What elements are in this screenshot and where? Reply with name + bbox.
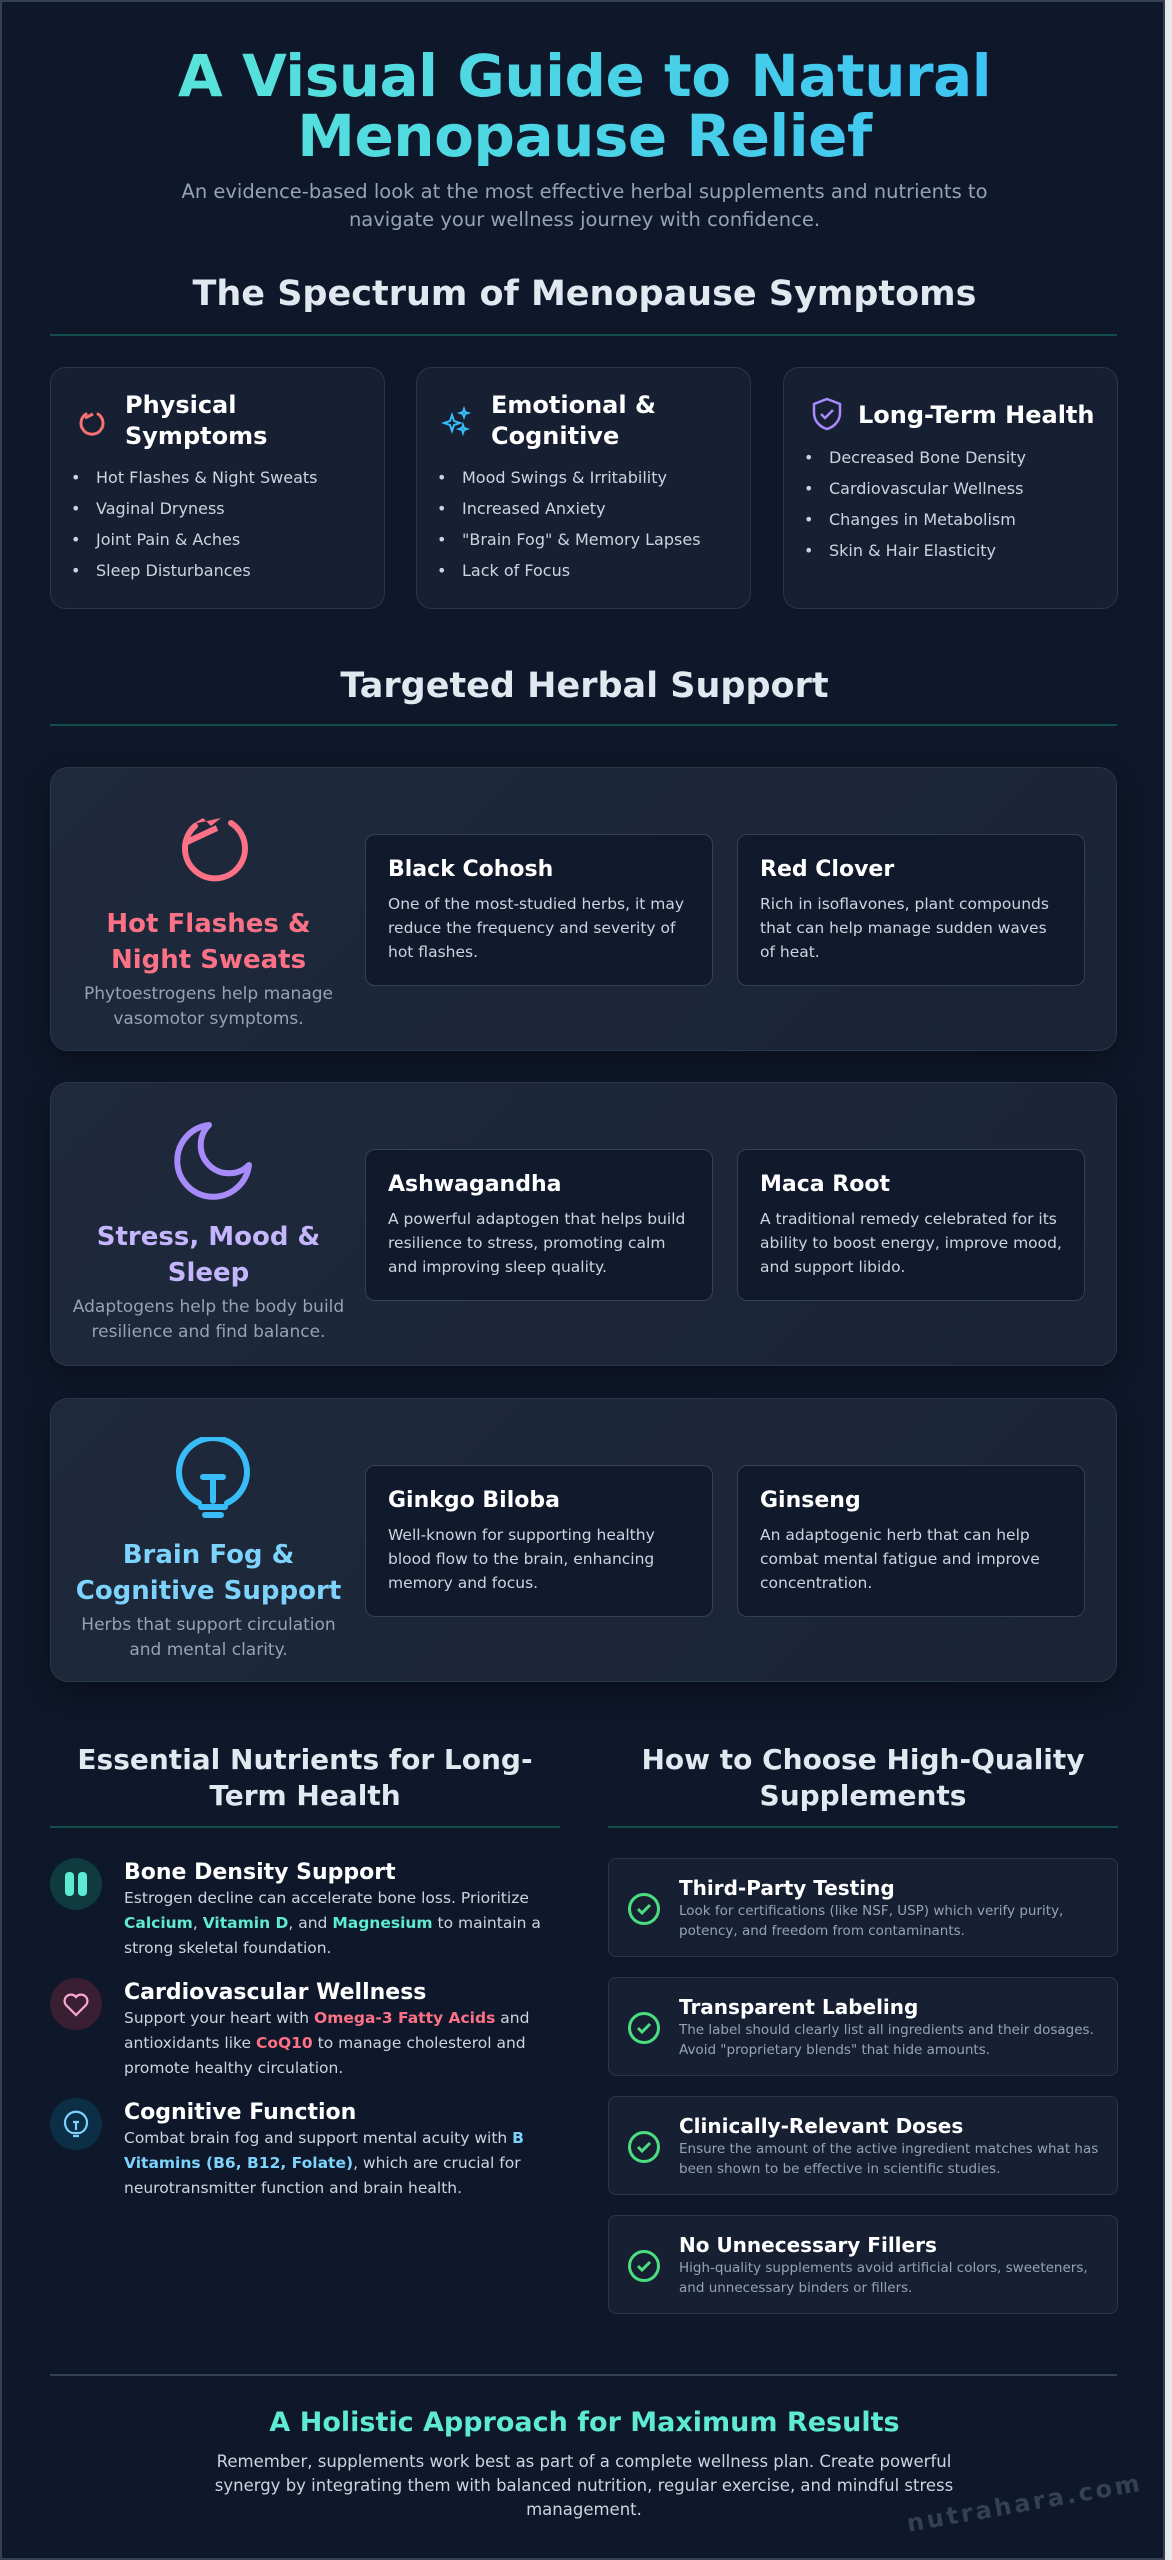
- list: Decreased Bone Density: [829, 448, 1026, 467]
- panel: hot flashes: [50, 767, 1117, 1051]
- list: Cardiovascular Wellness: [829, 479, 1023, 498]
- nutrient: cognitive: Combat brain fog and support mental acuity with B Vitamins (B6, B12, Folate), which are crucial for neurotransmitter function and brain health.: [124, 2129, 524, 2197]
- list: Vaginal Dryness: [96, 499, 225, 518]
- nutrient: cardiovascular: Support your heart with Omega-3 Fatty Acids and antioxidants like CoQ10 to manage cholesterol and promote healthy circulation.: [124, 2009, 529, 2077]
- supplement: transparent labeling: Transparent Labeling: [679, 1995, 918, 2019]
- supplement: clinically-relevant doses: Clinically-Relevant Doses: [679, 2114, 963, 2138]
- label: Cognitive Support: [76, 1576, 341, 1606]
- list: Hot Flashes & Night Sweats: [96, 468, 318, 487]
- nutrient: bone density: [50, 1858, 541, 1957]
- card: red clover: [737, 834, 1085, 986]
- supplement: third-party testing: Look for certifications (like NSF, USP) which verify purity, potency, and freedom from contaminants.: [679, 1903, 1063, 1939]
- list: Joint Pain & Aches: [96, 530, 240, 549]
- card: ashwagandha: Ashwagandha: [388, 1172, 561, 1197]
- panel: stress mood sleep: [50, 1082, 1117, 1366]
- label: Adaptogens help the body build resilience and find balance.: [73, 1297, 344, 1342]
- card: ginseng: Ginseng: [760, 1488, 861, 1513]
- card: ginkgo: Ginkgo Biloba: [388, 1488, 560, 1513]
- label: Sleep: [168, 1258, 249, 1288]
- supplement: transparent labeling: [608, 1977, 1118, 2076]
- heading: Emotional &: [491, 391, 656, 419]
- list: [73, 468, 318, 580]
- nutrient: cardiovascular: Cardiovascular Wellness: [124, 1980, 426, 2005]
- icon: check: [628, 2131, 660, 2163]
- list: Lack of Focus: [462, 561, 570, 580]
- supplement: third-party testing: [608, 1858, 1118, 1957]
- title: Menopause Relief: [297, 102, 872, 170]
- card: black cohosh: One of the most-studied herbs, it may reduce the frequency and severity of hot flashes.: [388, 895, 684, 961]
- icon: bulb: [50, 2098, 102, 2150]
- footer heading: A Holistic Approach for Maximum Results: [269, 2407, 900, 2438]
- card: maca root: A traditional remedy celebrated for its ability to boost energy, improve mood, and support libido.: [760, 1210, 1062, 1276]
- icon: flame ring: [182, 818, 248, 882]
- heading: Physical: [125, 391, 236, 419]
- heading: Symptoms: [125, 422, 267, 450]
- label: Herbs that support circulation and mental clarity.: [81, 1615, 336, 1660]
- label: [76, 1540, 341, 1660]
- card: ginseng: An adaptogenic herb that can help combat mental fatigue and improve concentration.: [760, 1526, 1040, 1592]
- card: maca root: [737, 1149, 1085, 1301]
- icon: lightbulb: [176, 1437, 250, 1518]
- heading: Long-Term Health: [858, 401, 1094, 429]
- icon: check: [628, 1893, 660, 1925]
- icon: bone: [50, 1858, 102, 1910]
- card: ginkgo: Well-known for supporting healthy blood flow to the brain, enhancing memory and focus.: [388, 1526, 655, 1592]
- supplement: third-party testing: Third-Party Testing: [679, 1876, 895, 1900]
- card: maca root: Maca Root: [760, 1172, 890, 1197]
- heading: Cognitive: [491, 422, 619, 450]
- icon: moon: [174, 1122, 252, 1200]
- label: Stress, Mood &: [97, 1222, 320, 1252]
- list: Skin & Hair Elasticity: [829, 541, 996, 560]
- icon: flame: [80, 412, 104, 436]
- heading: how to choose: How to Choose High-Quality Supplements: [641, 1743, 1085, 1812]
- list: Increased Anxiety: [462, 499, 606, 518]
- supplement: transparent labeling: The label should clearly list all ingredients and their dosages. Avoid "proprietary blends" that hide amounts.: [679, 2022, 1094, 2058]
- icon: shield: [812, 398, 842, 430]
- label: Hot Flashes &: [106, 909, 311, 939]
- nutrient: bone density: Estrogen decline can accelerate bone loss. Prioritize Calcium, Vitamin D, and Magnesium to maintain a strong skeletal foundation.: [124, 1889, 541, 1957]
- panel: emotional & cognitive: [416, 367, 751, 609]
- nutrient: cardiovascular: [50, 1978, 529, 2077]
- card: black cohosh: [365, 834, 713, 986]
- panel: brain fog: [50, 1398, 1117, 1682]
- card: red clover: Rich in isoflavones, plant compounds that can help manage sudden waves of heat.: [760, 895, 1049, 961]
- subtitle: An evidence-based look at the most effective herbal supplements and nutrients to navigate your wellness journey with confidence.: [181, 180, 988, 231]
- nutrient: bone density: Bone Density Support: [124, 1860, 396, 1885]
- card: ginseng: [737, 1465, 1085, 1617]
- label: [72, 1222, 344, 1342]
- card: ginkgo: [365, 1465, 713, 1617]
- supplement: clinically-relevant doses: [608, 2096, 1118, 2195]
- list: "Brain Fog" & Memory Lapses: [462, 530, 701, 549]
- list: Mood Swings & Irritability: [462, 468, 667, 487]
- heading: targeted herbal support: Targeted Herbal Support: [340, 666, 829, 706]
- card: ashwagandha: A powerful adaptogen that helps build resilience to stress, promoting calm and improving sleep quality.: [388, 1210, 685, 1276]
- card: black cohosh: Black Cohosh: [388, 857, 553, 882]
- heading: [125, 391, 267, 450]
- nutrient: cognitive: [50, 2098, 524, 2197]
- supplement: no fillers: No Unnecessary Fillers: [679, 2233, 937, 2257]
- supplement: no fillers: [608, 2215, 1118, 2314]
- heading: essential nutrients: Essential Nutrients for Long-Term Health: [77, 1743, 533, 1812]
- card: red clover: Red Clover: [760, 857, 894, 882]
- title: A Visual Guide to Natural: [178, 42, 991, 110]
- icon: check: [628, 2012, 660, 2044]
- watermark: nutrahara.com: [905, 2469, 1145, 2538]
- label: Night Sweats: [111, 945, 306, 975]
- panel: physical symptoms: [50, 367, 385, 609]
- label: [84, 909, 333, 1029]
- title: [2, 46, 1167, 166]
- panel: long-term health: [783, 367, 1118, 609]
- footer text: Remember, supplements work best as part of a complete wellness plan. Create powerful synergy by integrating them with balanced nutrition, regular exercise, and mindful stress management.: [215, 2452, 953, 2519]
- list: Changes in Metabolism: [829, 510, 1016, 529]
- card: ashwagandha: [365, 1149, 713, 1301]
- list: [806, 448, 1026, 560]
- heading: spectrum of symptoms: The Spectrum of Menopause Symptoms: [192, 274, 976, 314]
- icon: heart: [50, 1978, 102, 2030]
- icon: check: [628, 2250, 660, 2282]
- list: [439, 468, 701, 580]
- label: Phytoestrogens help manage vasomotor symptoms.: [84, 984, 333, 1029]
- icon: sparkles: [441, 406, 471, 436]
- supplement: no fillers: High-quality supplements avoid artificial colors, sweeteners, and unnecessary binders or fillers.: [679, 2260, 1088, 2296]
- supplement: clinically-relevant doses: Ensure the amount of the active ingredient matches what has been shown to be effective in scientific studies.: [679, 2141, 1098, 2177]
- heading: [491, 391, 656, 450]
- nutrient: cognitive: Cognitive Function: [124, 2100, 356, 2125]
- list: Sleep Disturbances: [96, 561, 251, 580]
- label: Brain Fog &: [123, 1540, 294, 1570]
